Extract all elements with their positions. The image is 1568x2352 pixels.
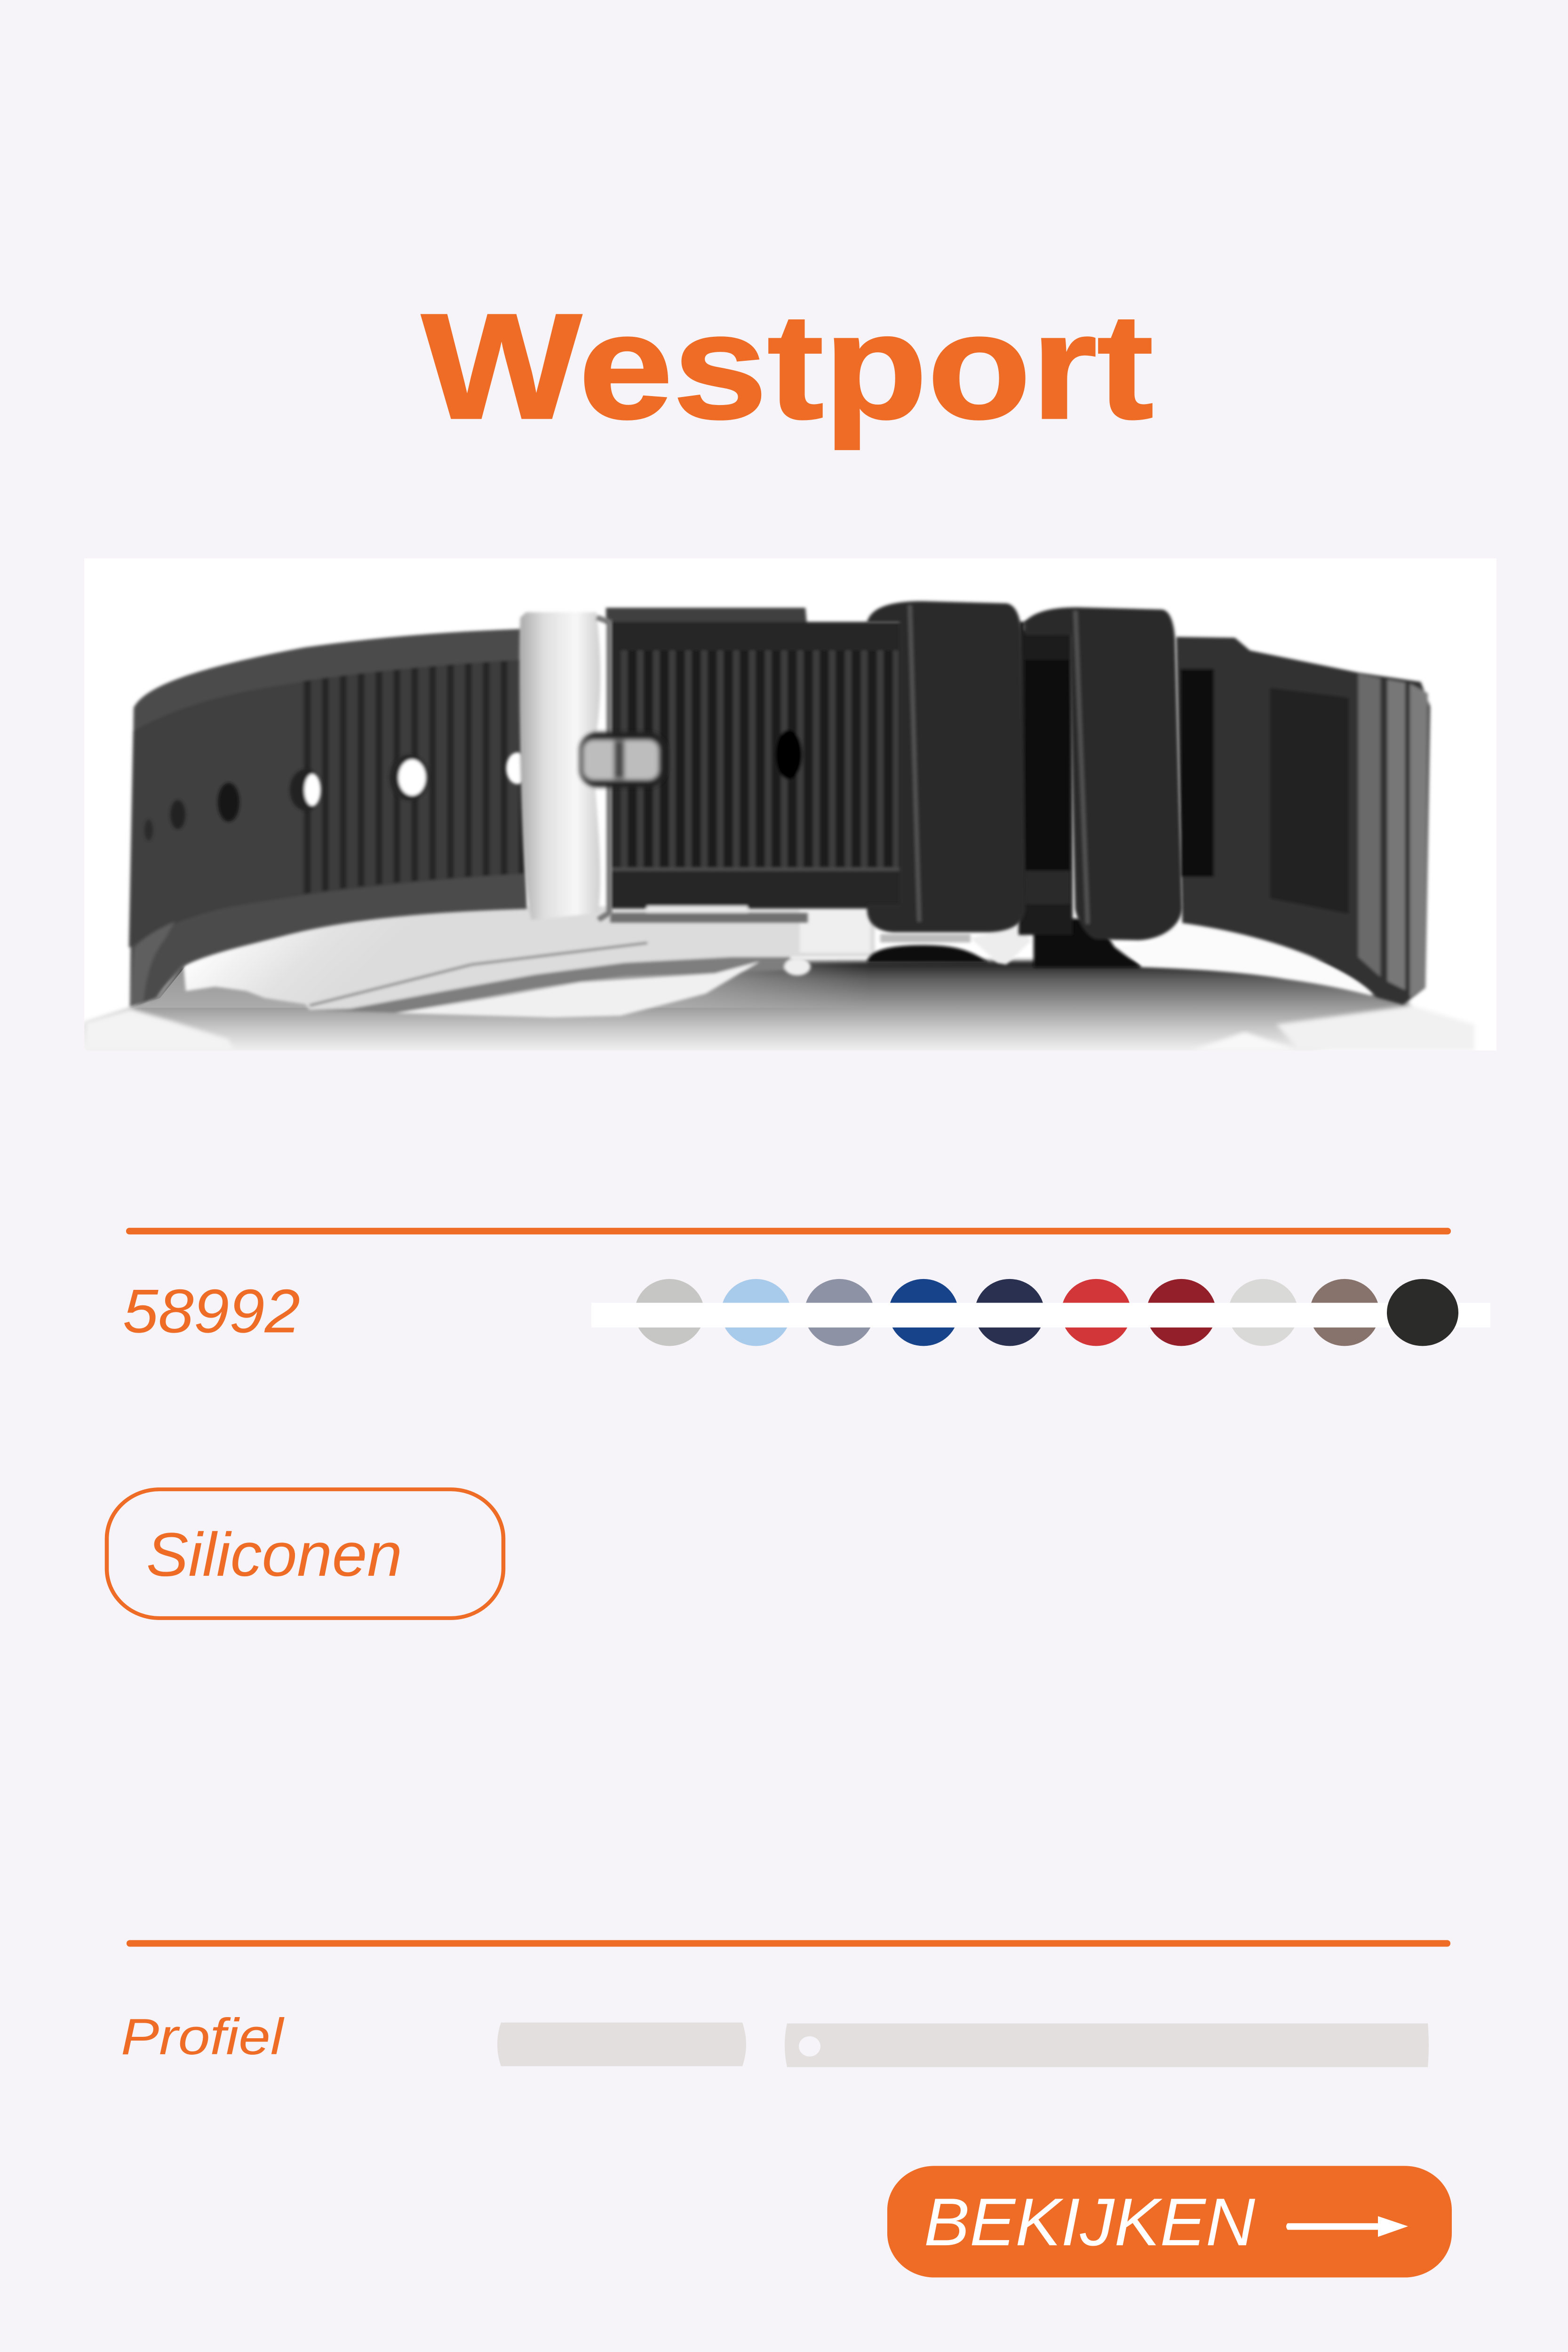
strap holes — [144, 752, 529, 841]
slider section behind the keepers — [1019, 622, 1073, 935]
strap keeper two — [1025, 607, 1182, 940]
view button: BEKIJKEN — [924, 2185, 1256, 2260]
right strap end — [1176, 637, 1430, 1005]
material tag: Siliconen — [146, 1520, 402, 1589]
buckle pin — [580, 732, 667, 787]
silver watch case under the strap — [141, 906, 1376, 1017]
material tag — [107, 1489, 503, 1618]
dark shapes under the keepers — [867, 919, 1141, 967]
strap keeper one — [867, 601, 1026, 932]
arrow — [1286, 2216, 1408, 2237]
colour swatches — [591, 1279, 1490, 1346]
product photo: black silicone watch strap — [84, 558, 1496, 1058]
profile shape: short strap piece — [497, 2023, 746, 2066]
article number: 58992 — [123, 1276, 300, 1345]
profile label: Profiel — [121, 2008, 285, 2065]
title: Westport — [422, 283, 1154, 451]
centre strap section — [606, 608, 904, 922]
left strap section — [129, 629, 527, 1007]
bottom divider — [127, 1940, 1450, 1947]
view button — [887, 2166, 1452, 2278]
top divider — [126, 1228, 1451, 1234]
profile shape: long strap piece — [785, 2024, 1429, 2067]
surface shadow beneath the strap — [85, 959, 1474, 1058]
steel buckle frame — [519, 612, 609, 920]
product card — [84, 314, 1496, 2278]
